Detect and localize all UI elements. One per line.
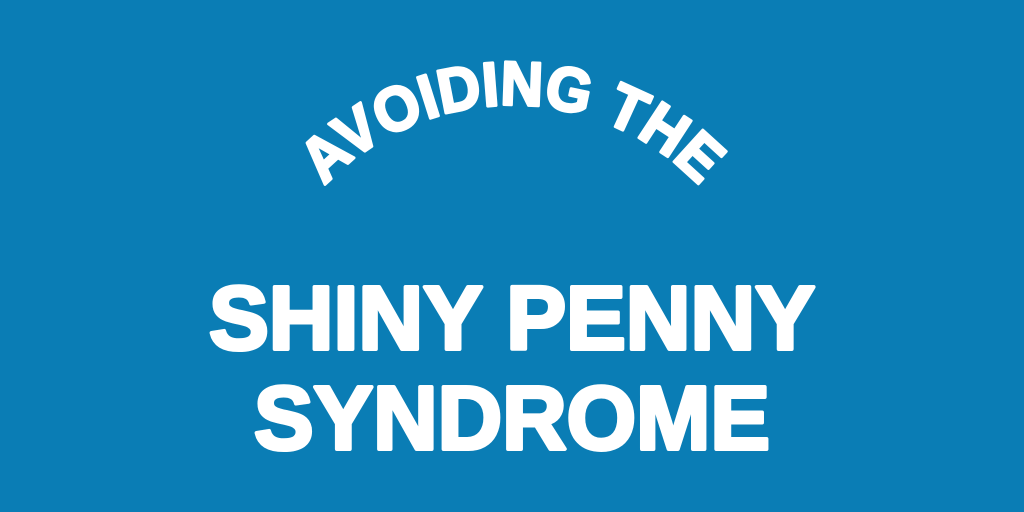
main title line 2: SYNDROME	[254, 369, 770, 469]
curved heading: AVOIDING THE: AVOIDING THE	[306, 60, 728, 186]
main title line 1: SHINY PENNY	[209, 269, 815, 369]
